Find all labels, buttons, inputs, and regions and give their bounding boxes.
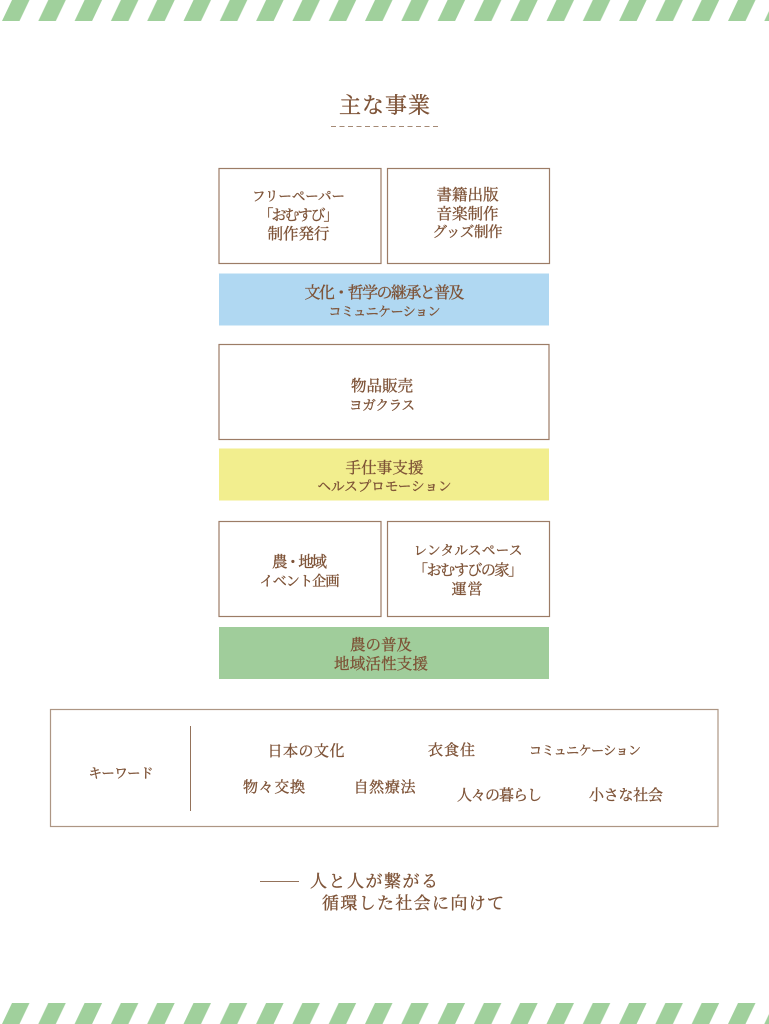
closing message: 循環した社会に向けて — [322, 894, 504, 913]
band: handwork and health: 手仕事支援 — [346, 459, 424, 477]
panel: rental space: 運営 — [452, 581, 482, 598]
title: 主な事業 — [339, 93, 430, 118]
panel: free paper — [219, 168, 381, 264]
band: culture and philosophy: コミュニケーション — [328, 304, 440, 319]
panel: rental space: レンタルスペース — [414, 543, 522, 558]
panel: rental space: 「おむすびの家」 — [413, 561, 523, 579]
panel: agriculture events — [219, 522, 381, 616]
bottom stripe band — [2, 1003, 769, 1024]
keyword list: 人々の暮らし — [457, 787, 542, 804]
panel: free paper: フリーペーパー — [252, 189, 345, 204]
keyword list: 自然療法 — [354, 778, 416, 796]
closing message: 人と人が繋がる — [310, 872, 438, 891]
panel: books, music, goods — [388, 168, 550, 264]
panel: books, music, goods: グッズ制作 — [432, 224, 502, 241]
keyword list: 衣食住 — [428, 742, 475, 759]
panel: goods sales, yoga: 物品販売 — [351, 376, 413, 395]
title — [331, 93, 438, 126]
keyword list — [243, 742, 663, 804]
closing message — [260, 872, 504, 913]
keyword list: 小さな社会 — [589, 787, 663, 804]
panel: books, music, goods: 音楽制作 — [436, 205, 498, 223]
keyword label: キーワード — [88, 766, 154, 781]
panel: free paper: 制作発行 — [268, 225, 330, 243]
band: culture and philosophy — [219, 274, 549, 326]
panel: agriculture events: イベント企画 — [260, 574, 340, 590]
keyword list: 日本の文化 — [268, 743, 344, 760]
band: agriculture and community: 農の普及 — [350, 636, 412, 654]
band: culture and philosophy: 文化・哲学の継承と普及 — [304, 284, 464, 302]
panel: books, music, goods: 書籍出版 — [436, 186, 499, 204]
keyword list: コミュニケーション — [529, 743, 641, 758]
band: agriculture and community — [219, 627, 549, 679]
panel: keywords — [50, 710, 718, 826]
keyword list: 物々交換 — [243, 778, 305, 796]
band: handwork and health: ヘルスプロモーション — [318, 479, 452, 494]
panel: goods sales, yoga: ヨガクラス — [349, 398, 415, 413]
band: handwork and health — [219, 448, 549, 500]
panel: goods sales, yoga — [219, 344, 549, 440]
panel: free paper: 「おむすび」 — [258, 207, 338, 224]
panel: rental space — [388, 522, 550, 616]
panel: agriculture events: 農・地域 — [272, 552, 327, 571]
top stripe band — [0, 0, 769, 21]
band: agriculture and community: 地域活性支援 — [334, 654, 428, 673]
